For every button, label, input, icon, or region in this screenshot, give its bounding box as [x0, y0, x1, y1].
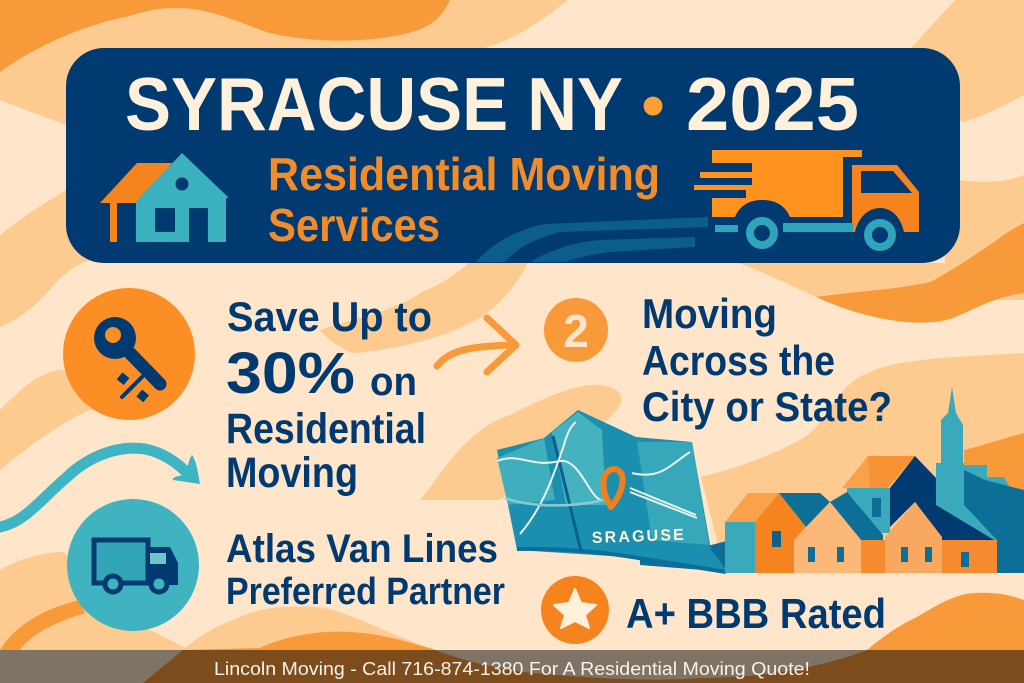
text: save up to 30% — [226, 293, 432, 497]
subtitle: Services — [268, 199, 440, 251]
map pin — [603, 469, 623, 507]
text: save up to 30%: 30% — [226, 341, 355, 406]
text: save up to 30%: on — [370, 360, 417, 404]
illustration: city houses — [725, 387, 1024, 573]
text: atlas van lines: Preferred Partner — [226, 571, 505, 613]
title: • — [641, 68, 665, 142]
title: SYRACUSE NY — [125, 62, 623, 146]
arrow: teal — [0, 448, 200, 527]
icon: step number 2 — [544, 298, 608, 362]
text: moving across the city or state: City or State? — [642, 383, 892, 430]
icon: house — [100, 153, 228, 242]
text: bbb rating: A+ BBB Rated — [626, 590, 886, 637]
subtitle — [268, 148, 660, 251]
text: moving across the city or state: Moving — [642, 290, 777, 337]
text: save up to 30%: Residential — [226, 405, 426, 453]
panel: header banner — [66, 48, 960, 263]
icon: map: SRAGUSE — [592, 527, 684, 547]
text: save up to 30%: Save Up to — [227, 293, 432, 340]
text: atlas van lines — [226, 527, 505, 613]
icon: step number 2: 2 — [563, 305, 589, 357]
footer bar — [0, 650, 1024, 683]
title: 2025 — [686, 62, 859, 146]
icon: moving truck — [694, 150, 919, 247]
icon: star badge — [541, 576, 609, 644]
arrow: orange — [437, 318, 516, 372]
icon: delivery truck — [67, 499, 199, 631]
subtitle: Residential Moving — [268, 148, 660, 200]
text: save up to 30%: Moving — [226, 449, 358, 497]
footer bar: Lincoln Moving - Call 716-874-1380 For A Residential Moving Quote! — [214, 659, 810, 679]
text: moving across the city or state — [642, 290, 892, 430]
icon: key with percent — [63, 288, 195, 420]
text: atlas van lines: Atlas Van Lines — [226, 527, 498, 571]
text: moving across the city or state: Across the — [642, 337, 835, 384]
icon: map — [497, 410, 746, 572]
